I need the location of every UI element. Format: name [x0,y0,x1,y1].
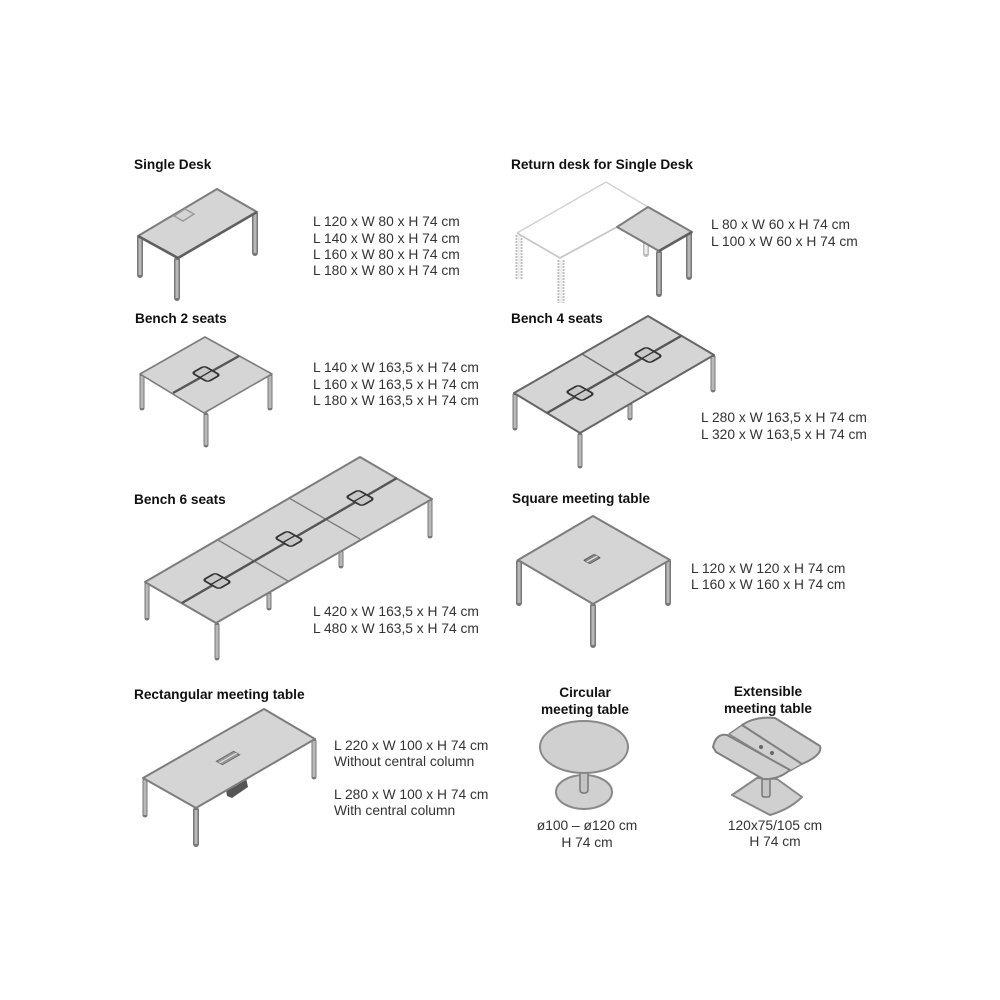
dimensions: single desk: L 140 x W 80 x H 74 cm [313,231,460,246]
illustration: bench 2 seats [140,337,272,445]
dimensions: bench 2 seats: L 180 x W 163,5 x H 74 cm [313,393,479,408]
dimensions: return desk: L 100 x W 60 x H 74 cm [711,234,858,249]
heading: bench 2 seats: Bench 2 seats [135,311,227,326]
dimensions: circular meeting table: H 74 cm [561,835,613,850]
panel: bench 6 seats [134,457,479,658]
dimensions: square meeting table: L 160 x W 160 x H 74 cm [691,577,845,592]
heading: circular meeting table [541,685,629,717]
dimensions: bench 2 seats [313,360,479,408]
panel: bench 4 seats [511,311,867,466]
heading: extensible meeting table: Extensible [734,684,803,699]
dimensions: single desk: L 180 x W 80 x H 74 cm [313,263,460,278]
dimensions: rectangular meeting table: L 220 x W 100 x H 74 cm [334,738,488,753]
illustration: return desk [517,182,692,303]
dimensions: square meeting table [691,561,845,592]
heading: square meeting table: Square meeting table [512,491,650,506]
dimensions: circular meeting table: ø100 – ø120 cm [537,818,637,833]
dimensions: bench 4 seats: L 320 x W 163,5 x H 74 cm [701,427,867,442]
heading: bench 4 seats: Bench 4 seats [511,311,603,326]
dimensions: circular meeting table [537,818,637,850]
heading: extensible meeting table: meeting table [724,701,812,716]
dimensions: rectangular meeting table: Without central column [334,754,474,769]
dimensions: square meeting table: L 120 x W 120 x H 74 cm [691,561,845,576]
heading: bench 6 seats: Bench 6 seats [134,492,226,507]
panel: circular meeting table [537,685,637,850]
heading: single desk: Single Desk [134,157,212,172]
heading: circular meeting table: meeting table [541,702,629,717]
panel: return desk [511,157,858,303]
heading: circular meeting table: Circular [559,685,611,700]
heading: rectangular meeting table: Rectangular meeting table [134,687,305,702]
dimensions: bench 4 seats [701,410,867,442]
illustration: single desk [138,189,257,298]
dimensions: rectangular meeting table: L 280 x W 100 x H 74 cm [334,787,488,802]
dimensions: single desk: L 160 x W 80 x H 74 cm [313,247,460,262]
dimensions: return desk: L 80 x W 60 x H 74 cm [711,217,850,232]
panel: extensible meeting table [713,684,822,849]
dimensions: return desk [711,217,858,249]
dimensions: bench 4 seats: L 280 x W 163,5 x H 74 cm [701,410,867,425]
dimensions: extensible meeting table: H 74 cm [749,834,801,849]
dimensions: single desk [313,214,460,278]
dimensions: bench 6 seats: L 480 x W 163,5 x H 74 cm [313,621,479,636]
dimensions: rectangular meeting table: With central column [334,803,455,818]
heading: extensible meeting table [724,684,812,716]
panel: square meeting table [512,491,845,645]
illustration: square meeting table [518,516,670,645]
heading: return desk: Return desk for Single Desk [511,157,693,172]
panel: rectangular meeting table [134,687,488,844]
panel: bench 2 seats [135,311,479,445]
illustration: bench 4 seats [514,316,714,466]
dimensions: bench 2 seats: L 140 x W 163,5 x H 74 cm [313,360,479,375]
dimensions: single desk: L 120 x W 80 x H 74 cm [313,214,460,229]
panel: single desk [134,157,460,298]
dimensions: extensible meeting table [728,818,822,849]
illustration: bench 6 seats [145,457,432,658]
dimensions: extensible meeting table: 120x75/105 cm [728,818,822,833]
illustration: extensible meeting table [713,718,820,815]
dimensions: bench 6 seats [313,604,479,636]
illustration: rectangular meeting table [143,709,315,844]
illustration: circular meeting table [540,721,628,809]
dimensions: bench 2 seats: L 160 x W 163,5 x H 74 cm [313,377,479,392]
dimensions: rectangular meeting table [334,738,488,818]
dimensions: bench 6 seats: L 420 x W 163,5 x H 74 cm [313,604,479,619]
